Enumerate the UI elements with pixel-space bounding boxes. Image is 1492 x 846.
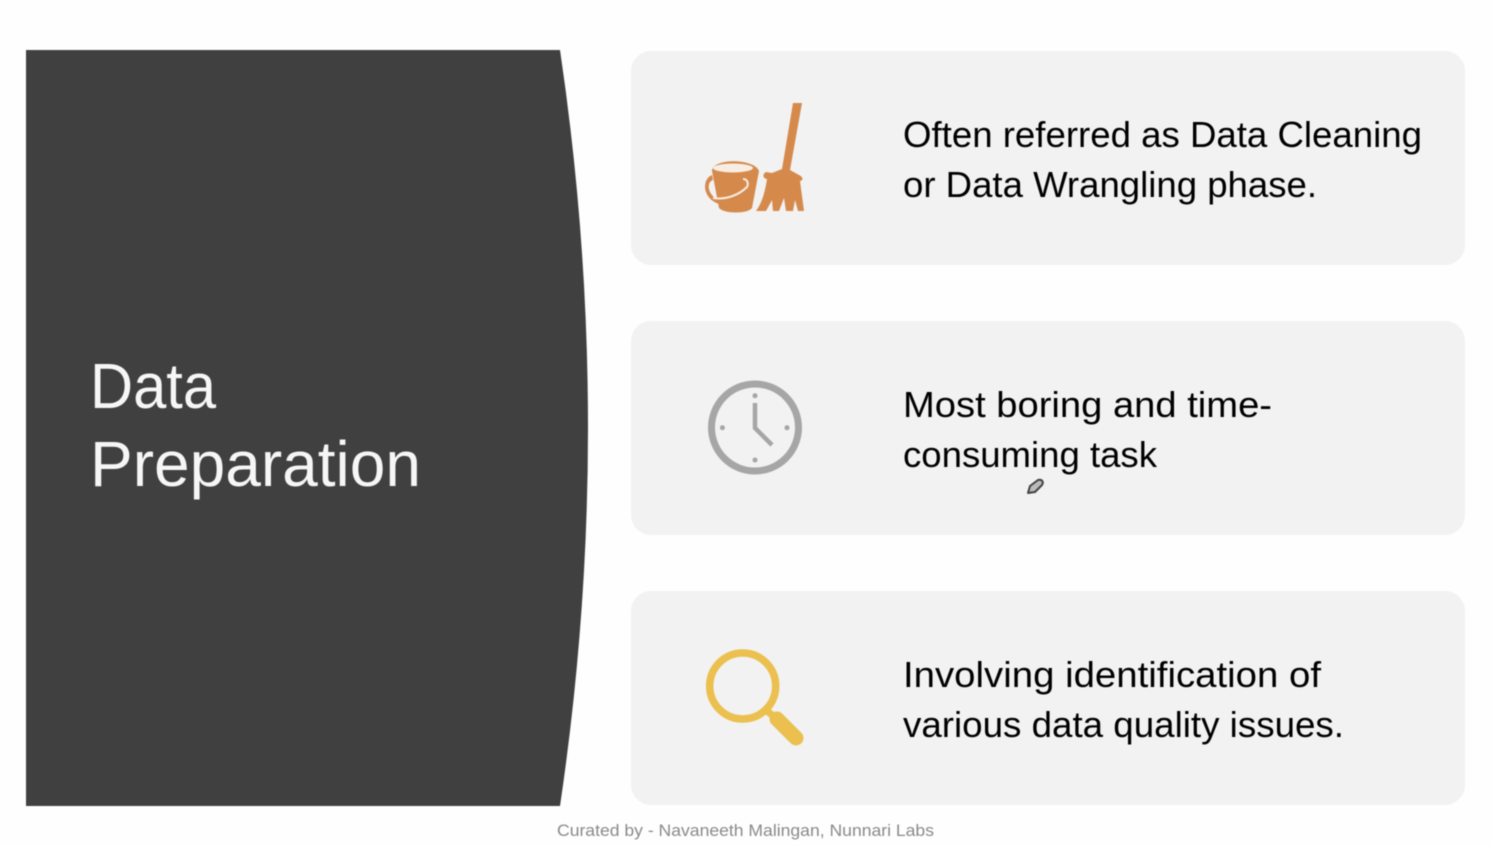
text: boring task <box>903 384 1272 475</box>
text: data quality <box>903 654 1344 745</box>
panel: dark title panel <box>26 50 588 806</box>
text: boring task: consuming task <box>903 434 1158 475</box>
panel: data quality card <box>631 591 1465 805</box>
icon: pencil cursor <box>1028 480 1043 493</box>
text: data cleaning <box>903 114 1422 205</box>
text: data quality: Involving identification of <box>903 654 1322 695</box>
text: data cleaning: or Data Wrangling phase. <box>903 164 1317 205</box>
text: data quality: various data quality issues. <box>903 704 1344 745</box>
title <box>90 350 421 500</box>
text: boring task: Most boring and time- <box>903 384 1272 425</box>
icon: magnifying glass <box>710 653 796 738</box>
panel: boring task card <box>631 321 1465 535</box>
icon: bucket and mop <box>705 103 804 212</box>
text: data cleaning: Often referred as Data Cleaning <box>903 114 1422 155</box>
title: Preparation <box>90 428 421 500</box>
panel: data cleaning card <box>631 51 1465 265</box>
icon: clock <box>712 384 798 471</box>
title: Data <box>90 350 216 422</box>
footer credit: Curated by - Navaneeth Malingan, Nunnari Labs <box>557 821 934 840</box>
